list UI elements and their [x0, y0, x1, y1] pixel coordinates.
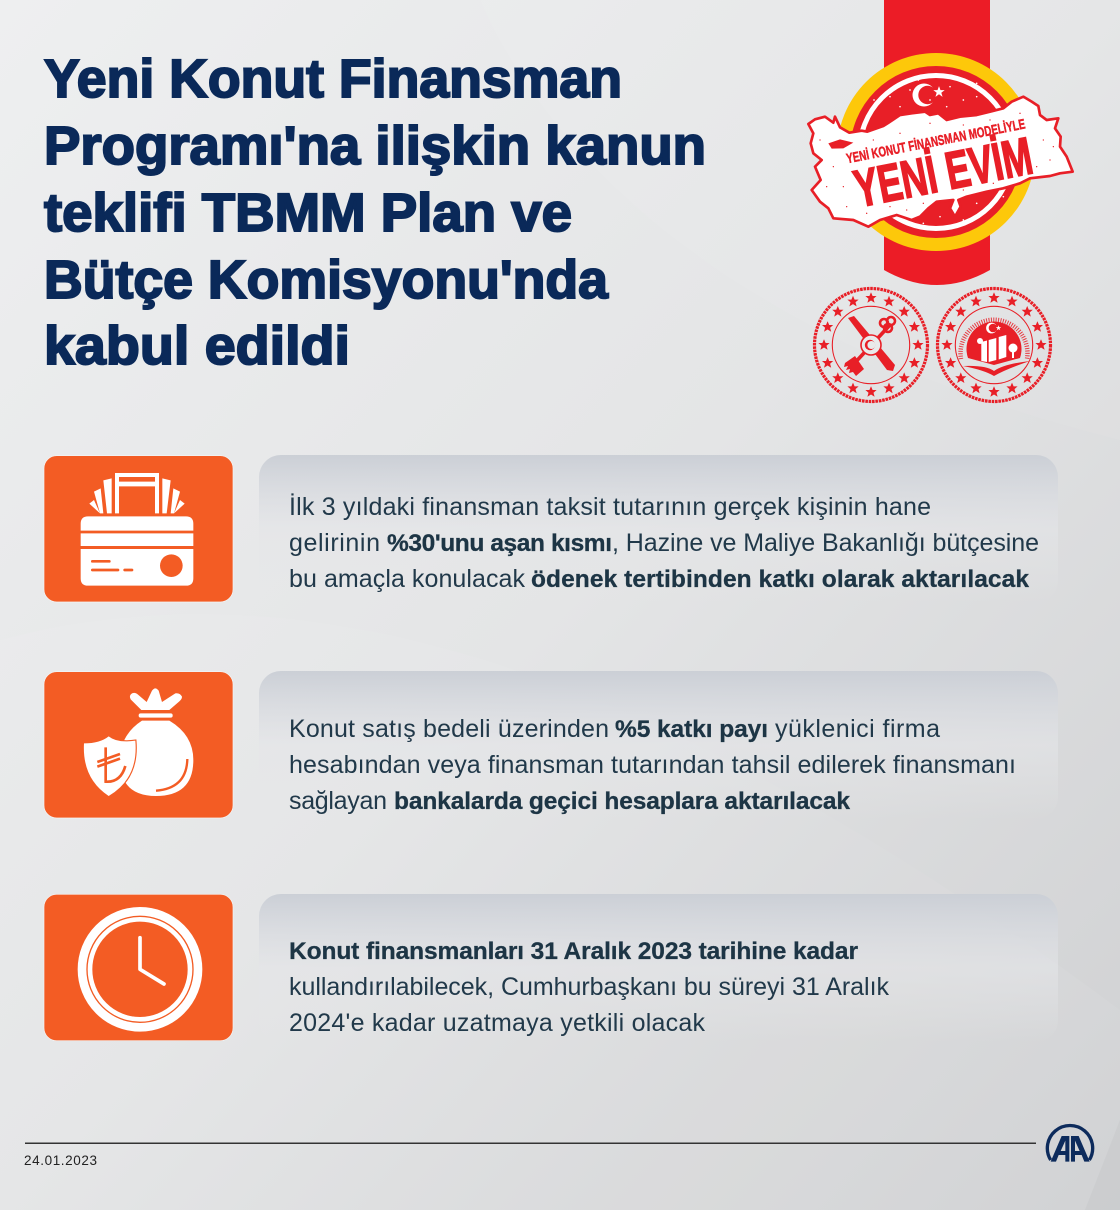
- panel text: [289, 715, 1016, 815]
- text panel: [259, 455, 1058, 603]
- text panel: [259, 671, 1058, 819]
- crescent and star: [912, 84, 945, 106]
- panel text: Konut finansmanları 31 Aralık 2023 tarihine kadar: [289, 938, 858, 965]
- logo: AA: [1047, 1126, 1093, 1162]
- panel text: bankalarda geçici hesaplara aktarılacak: [394, 788, 850, 815]
- panel text: yüklenici firma: [775, 715, 940, 743]
- icon box: money bag and shield: [44, 672, 233, 818]
- title: [44, 49, 706, 376]
- title: kabul edildi: [44, 316, 350, 376]
- panel text: %5 katkı payı: [615, 716, 768, 743]
- date: 24.01.2023: [24, 1153, 97, 1168]
- panel text: %30'unu aşan kısmı: [387, 530, 612, 557]
- crossed keys: [844, 316, 895, 376]
- sun with buildings: [960, 320, 1030, 376]
- panel text: ödenek tertibinden katkı olarak aktarılacak: [531, 566, 1029, 593]
- panel text: İlk 3 yıldaki finansman taksit tutarının gerçek kişinin hane: [289, 492, 931, 521]
- panel 1: [44, 455, 1058, 603]
- panel text: [289, 492, 1039, 593]
- panel text: gelirinin: [289, 529, 380, 557]
- panel 2: [44, 671, 1058, 819]
- panel text: [289, 938, 890, 1037]
- panel text: sağlayan: [289, 787, 387, 815]
- map of Turkey: [808, 80, 1073, 227]
- panel text: hesabından veya finansman tutarından tahsil edilerek finansmanı: [289, 751, 1016, 779]
- title: Programı'na ilişkin kanun: [44, 116, 706, 176]
- title: Bütçe Komisyonu'nda: [44, 250, 609, 310]
- panel text: 2024'e kadar uzatmaya yetkili olacak: [289, 1009, 706, 1037]
- panel 3: [44, 894, 1058, 1042]
- seal: buildings: [938, 288, 1050, 402]
- badge: Yeni Evim: [808, 53, 1073, 251]
- title: teklifi TBMM Plan ve: [44, 183, 572, 243]
- text panel: [259, 894, 1058, 1042]
- panel text: bu amaçla konulacak: [289, 565, 526, 593]
- badge name: YENİ EVİM: [849, 127, 1037, 219]
- footer rule: [25, 1142, 1036, 1144]
- badge tagline: YENİ KONUT FİNANSMAN MODELİYLE: [845, 116, 1027, 166]
- panel text: , Hazine ve Maliye Bakanlığı bütçesine: [612, 529, 1039, 557]
- ribbon: [884, 0, 990, 285]
- panel text: kullandırılabilecek, Cumhurbaşkanı bu süreyi 31 Aralık: [289, 973, 890, 1001]
- seal: keys: [814, 288, 928, 402]
- panel text: Konut satış bedeli üzerinden: [289, 715, 609, 743]
- icon box: card with banknotes: [44, 456, 233, 602]
- title: Yeni Konut Finansman: [44, 49, 622, 109]
- icon box: clock: [44, 894, 233, 1041]
